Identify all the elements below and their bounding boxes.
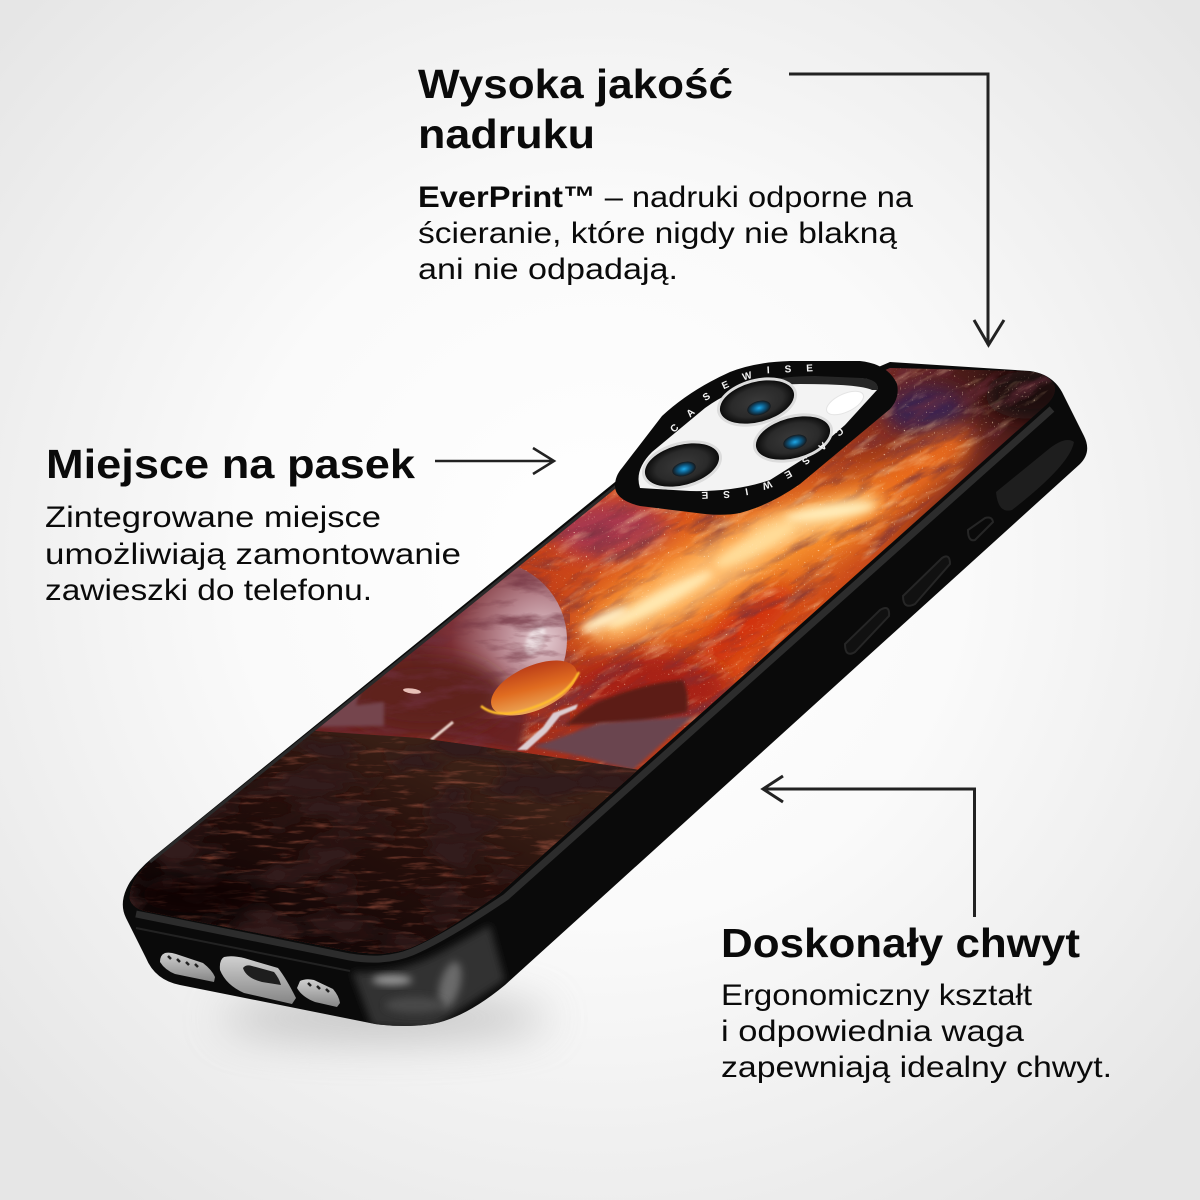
glossy bottom corner bbox=[352, 925, 505, 1030]
charging port bbox=[220, 956, 296, 1004]
arrow: grip bbox=[763, 776, 974, 917]
face edge line bbox=[150, 483, 620, 862]
body: strap slot: zawieszki do telefonu. bbox=[45, 574, 372, 607]
right lens bbox=[747, 405, 839, 471]
pale flame core right bbox=[744, 486, 886, 550]
orange glow right bbox=[837, 414, 986, 544]
rock texture bbox=[335, 556, 570, 747]
sky light texture bbox=[422, 368, 1048, 766]
case body bbox=[123, 362, 1087, 1026]
planet bbox=[409, 561, 567, 719]
body: print quality: ani nie odpadają. bbox=[418, 253, 678, 286]
planet lower blend bbox=[345, 657, 505, 733]
body: print quality: EverPrint™ – nadruki odporne na bbox=[418, 181, 913, 214]
callout: strap slot bbox=[45, 441, 461, 607]
pale flame core bbox=[587, 506, 806, 654]
rock left bbox=[320, 694, 386, 728]
phone drop shadow bbox=[220, 998, 550, 1038]
astronaut bbox=[517, 704, 578, 750]
body: strap slot: umożliwiają zamontowanie bbox=[45, 538, 461, 571]
light streak bbox=[431, 722, 453, 740]
top right violet cloud bbox=[883, 386, 967, 434]
nebula base bbox=[120, 360, 1070, 970]
bumper ring bbox=[615, 361, 898, 515]
volume up button bbox=[903, 556, 950, 606]
ring planet bbox=[491, 660, 577, 716]
heading: print quality: Wysoka jakość bbox=[418, 61, 733, 107]
side button top bbox=[968, 518, 993, 540]
brand text top: CASEWISE bbox=[670, 364, 813, 432]
body: print quality bbox=[418, 181, 913, 286]
callout: grip bbox=[721, 920, 1112, 1084]
body: grip: Ergonomiczny kształt bbox=[721, 979, 1033, 1012]
ground dark texture bbox=[120, 730, 640, 960]
camera bumper bbox=[615, 361, 898, 515]
left lens bbox=[636, 432, 728, 498]
distant dark hill bbox=[565, 680, 688, 725]
dark corner bbox=[985, 371, 1075, 419]
ground bbox=[120, 730, 640, 960]
ground red texture bbox=[120, 730, 640, 960]
red patch bbox=[694, 576, 798, 664]
body: grip: i odpowiednia waga bbox=[721, 1015, 1024, 1048]
dark rock mass bbox=[315, 654, 531, 752]
camera well bbox=[638, 378, 877, 491]
white flare bbox=[578, 604, 630, 636]
body: grip bbox=[721, 979, 1112, 1084]
lower red sky bbox=[570, 652, 730, 728]
heading: grip: Doskonały chwyt bbox=[721, 920, 1080, 966]
planet swirl bbox=[524, 624, 546, 656]
flash bbox=[823, 386, 867, 420]
golden ring bbox=[481, 672, 579, 714]
left speaker bbox=[160, 953, 215, 982]
brand text bottom: CASEWISE bbox=[702, 428, 843, 499]
right speaker bbox=[297, 979, 340, 1007]
flame bridge bbox=[714, 522, 795, 570]
printed artwork bbox=[130, 368, 1055, 954]
heading: strap slot: Miejsce na pasek bbox=[46, 441, 415, 487]
body: grip: zapewniają idealny chwyt. bbox=[721, 1051, 1112, 1084]
left pink sky bbox=[550, 500, 670, 560]
well shading bbox=[745, 376, 877, 392]
arrow: print quality bbox=[789, 74, 1004, 345]
bright flame band bbox=[562, 464, 898, 660]
yellow core right bbox=[785, 500, 875, 524]
volume down button bbox=[845, 608, 889, 654]
side bevel highlight bbox=[136, 409, 1052, 959]
sky dark texture bbox=[510, 368, 1052, 767]
heading: print quality: nadruku bbox=[418, 111, 595, 157]
body: strap slot: Zintegrowane miejsce bbox=[45, 501, 381, 534]
rim highlight bbox=[136, 928, 350, 971]
phone case illustration bbox=[122, 361, 1088, 1026]
dark ground corner bbox=[140, 877, 260, 913]
callout: print quality bbox=[418, 61, 913, 286]
body: print quality: ścieranie, które nigdy nie blakną bbox=[418, 217, 897, 250]
top lens bbox=[711, 369, 803, 435]
yellow core bbox=[603, 565, 717, 635]
distant rocks bbox=[533, 716, 693, 770]
body: strap slot bbox=[45, 501, 461, 607]
arrow: strap slot bbox=[435, 448, 554, 474]
heading: print quality bbox=[418, 61, 733, 157]
rock glint bbox=[403, 688, 421, 694]
star speckles bbox=[520, 360, 1070, 760]
strap slot bbox=[996, 440, 1074, 511]
